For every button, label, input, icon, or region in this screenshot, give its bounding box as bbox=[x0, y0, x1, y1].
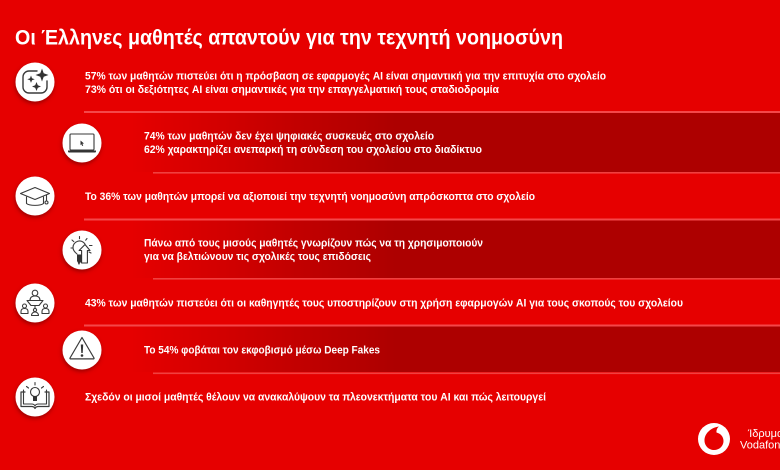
icon: teacher and students bbox=[16, 284, 54, 322]
text: more than half of students bbox=[144, 238, 483, 263]
panel: row 4 school performance band bbox=[62, 218, 780, 280]
text: discover AI statement: Σχεδόν οι μισοί μαθητές θέλουν να ανακαλύψουν τα πλεονεκτήματα του AI και πώς λειτουργεί bbox=[85, 392, 546, 404]
text: 57% and 73% statistics: 57% των μαθητών πιστεύει ότι η πρόσβαση σε εφαρμογές AI είναι σημαντική για την επιτυχία στο σχολείο bbox=[85, 70, 606, 82]
text: more than half of students: Πάνω από τους μισούς μαθητές γνωρίζουν πώς να τη χρησιμοποιούν bbox=[144, 238, 483, 250]
title: Οι Έλληνες μαθητές απαντούν για την τεχνητή νοημοσύνη bbox=[15, 26, 563, 50]
panel: row 1 AI importance bbox=[16, 62, 606, 102]
panel: row 6 deep fakes band bbox=[62, 324, 780, 374]
text: 74% and 62% statistics: 74% των μαθητών δεν έχει ψηφιακές συσκευές στο σχολείο bbox=[144, 130, 434, 142]
icon: warning triangle bbox=[62, 330, 102, 370]
text: more than half of students: για να βελτιώνουν τις σχολικές τους επιδόσεις bbox=[144, 251, 371, 263]
text: 54% statistic: Το 54% φοβάται τον εκφοβισμό μέσω Deep Fakes bbox=[144, 344, 380, 356]
icon: graduation cap bbox=[16, 176, 54, 216]
text: 43% statistic: 43% των μαθητών πιστεύει ότι οι καθηγητές τους υποστηρίζουν στη χρήση εφαρμογών AI για τους σκοπούς του σχολείου bbox=[85, 298, 683, 310]
icon: book with light bulb bbox=[16, 378, 54, 416]
panel: row 2 devices band bbox=[62, 111, 780, 174]
icon: laptop bbox=[62, 124, 102, 162]
text: 74% and 62% statistics: 62% χαρακτηρίζει ανεπαρκή τη σύνδεση του σχολείου στο διαδίκτυο bbox=[144, 144, 482, 156]
text: 36% statistic: Το 36% των μαθητών μπορεί να αξιοποιεί την τεχνητή νοημοσύνη απρόσκοπτα στο σχολείο bbox=[85, 191, 535, 203]
text: 57% and 73% statistics: 73% ότι οι δεξιότητες AI είναι σημαντικές για την επαγγελματική τους σταδιοδρομία bbox=[85, 84, 499, 96]
text: 57% and 73% statistics bbox=[85, 70, 606, 96]
panel: row 3 36 percent bbox=[16, 176, 535, 216]
text: 74% and 62% statistics bbox=[144, 130, 482, 156]
icon: light bulb with arrow bbox=[62, 230, 102, 270]
icon: AI sparkles bbox=[16, 62, 54, 102]
panel: row 5 teachers bbox=[16, 284, 683, 322]
panel: row 7 discover AI bbox=[16, 378, 546, 416]
logo: Vodafone Foundation bbox=[698, 423, 780, 455]
